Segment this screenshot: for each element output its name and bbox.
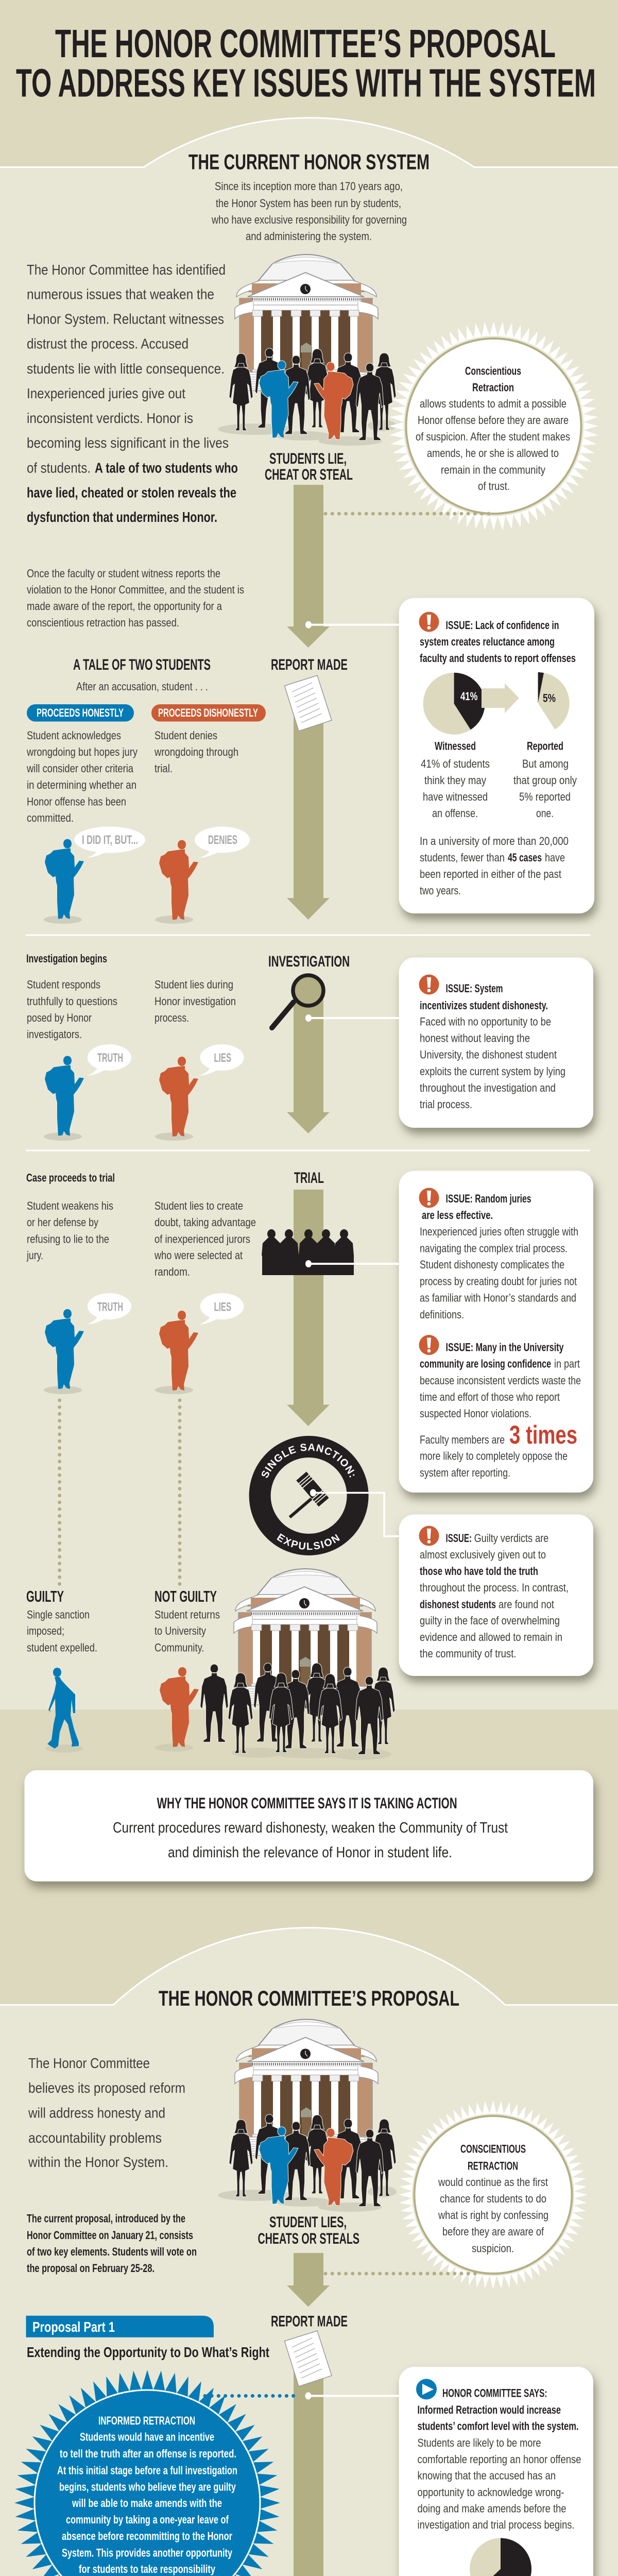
panel: why the committee says it is taking action: WHY THE HONOR COMMITTEE SAYS IT IS TAKING ACTION — [157, 1795, 457, 1812]
text: reported: that group only — [513, 774, 577, 787]
heading: students lie, cheat or steal — [265, 450, 353, 483]
panel: issue guilty verdicts — [399, 1515, 593, 1676]
pill: proceeds honestly — [27, 704, 134, 721]
text: honest investigation: Student responds — [27, 978, 100, 991]
illustration: student crowd 1 — [218, 348, 397, 446]
text: honest investigation: truthfully to questions — [27, 995, 117, 1008]
heading: report made: REPORT MADE — [271, 656, 348, 673]
text: random juries: navigating the complex trial process. — [420, 1242, 568, 1255]
callout: conscientious retraction, proposal: would continue as the first — [438, 2176, 548, 2189]
text: reported: Reported — [527, 740, 563, 753]
text: reported: But among — [522, 757, 569, 770]
text: committee belief: accountability problems — [28, 2130, 162, 2146]
text: report note — [27, 567, 244, 629]
icon: magnifier — [272, 975, 323, 1028]
text: honest student report: Student acknowledges — [27, 729, 121, 742]
heading: investigation: INVESTIGATION — [268, 953, 350, 970]
callout: informed retraction: for students to take responsibility — [79, 2563, 216, 2575]
figure: blue student truth: TRUTH — [97, 1051, 123, 1065]
panel: why the committee says it is taking action: Current procedures reward dishonesty, weaken the Community of Trust — [113, 1820, 508, 1836]
callout: conscientious retraction: of suspicion. After the student makes — [416, 430, 570, 443]
text: guilty verdicts: those who have told the truth — [420, 1565, 538, 1578]
panel: committee says informed retraction — [305, 2367, 593, 2576]
panel: issue lack of confidence — [305, 598, 594, 913]
path: dishonest verdict dots — [178, 1400, 181, 1584]
connector — [305, 1014, 399, 1022]
heading: the honor committee's proposal: THE HONOR COMMITTEE’S PROPOSAL — [159, 1986, 459, 2010]
title — [16, 22, 596, 105]
figure: blue student truth at trial — [44, 1293, 131, 1394]
text: dishonest trial — [154, 1199, 256, 1278]
text: comfort level: investigation and trial process begins. — [417, 2518, 575, 2531]
text: issue copy: throughout the investigation and — [420, 1081, 556, 1094]
icon: report paper — [284, 675, 332, 731]
callout: conscientious retraction, proposal: chance for students to do — [440, 2192, 546, 2205]
stat: 3 times: more likely to completely oppose the — [420, 1450, 568, 1463]
text: losing confidence — [420, 1341, 581, 1420]
text: witnessed — [421, 740, 490, 820]
text: losing confidence: community are losing confidence — [420, 1357, 551, 1370]
text: guilty verdicts: Guilty verdicts are — [474, 1532, 548, 1545]
text: report note: Once the faculty or student witness reports the — [27, 567, 220, 580]
text: issues overview: inconsistent verdicts. Honor is — [27, 410, 193, 426]
callout: informed retraction: will be able to make amends with the — [72, 2497, 222, 2510]
text: dishonest student report — [154, 729, 238, 775]
arrow: report to investigation — [287, 716, 330, 920]
text: dishonest trial: who were selected at — [154, 1249, 243, 1262]
text: honest trial: jury. — [26, 1249, 43, 1262]
text: issue copy: exploits the current system by lying — [420, 1065, 565, 1078]
text: guilty verdicts: are found not — [499, 1598, 554, 1611]
text: issues overview: A tale of two students who — [95, 460, 238, 476]
text: issue copy: trial process. — [420, 1098, 472, 1111]
text: issue copy: Faced with no opportunity to be — [420, 1015, 551, 1028]
text: intro: Since its inception more than 170 years ago, — [215, 180, 403, 193]
stat: 3 times — [420, 1420, 577, 1479]
text: honest student report: will consider other criteria — [26, 762, 134, 775]
text: issues overview: becoming less significant in the lives — [27, 435, 229, 451]
text: issues overview: Honor System. Reluctant witnesses — [27, 311, 224, 327]
illustration: student crowd 2 — [200, 1663, 395, 1760]
heading: student lies, cheats or steals — [258, 2214, 359, 2247]
callout: conscientious retraction — [387, 319, 600, 533]
text: guilty — [26, 1587, 97, 1654]
figure: orange student lies: LIES — [214, 1051, 231, 1065]
callout: informed retraction — [11, 2366, 284, 2576]
text: comfort level: doing and make amends before the — [417, 2502, 566, 2515]
text: guilty verdicts — [420, 1532, 569, 1660]
text: dishonest trial: Student lies to create — [154, 1199, 243, 1212]
text: honest student report: Honor offense has been — [27, 795, 126, 808]
text: current proposal: the proposal on February 25-28. — [27, 2262, 154, 2275]
text: 45 cases: have — [545, 851, 565, 864]
text: committee belief: believes its proposed reform — [28, 2080, 185, 2096]
text: dishonest trial: doubt, taking advantage — [154, 1216, 256, 1229]
text: comfort level: knowing that the accused has an — [417, 2469, 556, 2482]
callout: conscientious retraction, proposal: before they are aware of — [442, 2225, 544, 2238]
callout: conscientious retraction, proposal: suspicion. — [472, 2242, 514, 2255]
icon: issue — [419, 1335, 439, 1355]
text: reported — [513, 740, 577, 820]
arrow: witnessed to reported — [482, 683, 519, 713]
figure: blue student truth — [44, 1044, 131, 1141]
connector — [305, 1260, 399, 1267]
callout: conscientious retraction: Retraction — [472, 381, 514, 394]
text: intro: the Honor System has been run by students, — [216, 197, 401, 210]
text: witnessed: think they may — [424, 774, 486, 787]
chart: reported pie 5% — [538, 672, 570, 730]
callout: informed retraction: Students would have an incentive — [80, 2431, 214, 2444]
text: dishonest student report: wrongdoing through — [154, 745, 238, 758]
text: 45 cases: two years. — [420, 884, 461, 897]
pill: proceeds dishonestly — [151, 704, 266, 721]
connector — [305, 621, 399, 629]
illustration: rotunda 2 — [234, 1569, 377, 1705]
callout: conscientious retraction: amends, he or she is allowed to — [427, 447, 559, 460]
text: comfort level: HONOR COMMITTEE SAYS: — [442, 2387, 547, 2400]
heading: issue text — [420, 619, 576, 665]
text: current proposal: of two key elements. Students will vote on — [27, 2245, 197, 2258]
text: not guilty: NOT GUILTY — [154, 1587, 217, 1605]
callout: informed retraction: INFORMED RETRACTION — [98, 2414, 195, 2427]
text: random juries: ISSUE: Random juries — [446, 1192, 531, 1205]
callout: informed retraction: System. This provides another opportunity — [62, 2547, 233, 2560]
callout: informed retraction: community by taking a one-year leave of — [66, 2513, 229, 2526]
icon: issue — [419, 612, 439, 632]
heading: students lie, cheat or steal: STUDENTS LIE, — [269, 450, 347, 467]
text: committee belief: The Honor Committee — [28, 2055, 150, 2071]
heading: extending the opportunity: Extending the Opportunity to Do What’s Right — [27, 2344, 269, 2360]
text: not guilty: to University — [154, 1624, 206, 1637]
figure: orange student lies — [155, 1044, 244, 1141]
text: committee belief — [28, 2055, 185, 2170]
text: random juries: are less effective. — [422, 1209, 493, 1222]
text: honest investigation: investigators. — [27, 1028, 82, 1041]
text: guilty: imposed; — [27, 1624, 64, 1637]
panel: why the committee says it is taking action — [25, 1770, 593, 1882]
text: random juries: process by creating doubt for juries not — [420, 1275, 577, 1288]
text: comfort level: Students are likely to be more — [417, 2436, 541, 2449]
icon: play — [416, 2379, 437, 2399]
figure: blue student truth at trial: TRUTH — [97, 1300, 123, 1314]
background: proposal section — [0, 1928, 618, 2576]
text: honest trial — [26, 1199, 113, 1262]
text: issue copy: incentivizes student dishonesty. — [420, 999, 548, 1012]
callout: conscientious retraction, proposal — [397, 2099, 589, 2291]
icon: issue — [419, 975, 439, 994]
text: random juries: Inexperienced juries often struggle with — [420, 1225, 578, 1238]
text: guilty: student expelled. — [27, 1641, 97, 1654]
stat: 3 times: 3 times — [509, 1420, 577, 1449]
heading: trial: TRIAL — [294, 1170, 324, 1187]
text: dishonest investigation: process. — [154, 1011, 189, 1024]
text: not guilty: Community. — [154, 1641, 204, 1654]
heading: issue text: system creates reluctance among — [420, 635, 555, 648]
tab: proposal part 1 — [26, 2316, 214, 2337]
text: report note: made aware of the report, the opportunity for a — [27, 600, 222, 613]
text: not guilty: Student returns — [154, 1608, 220, 1621]
text: 45 cases: 45 cases — [508, 851, 542, 864]
callout: conscientious retraction: Honor offense before they are aware — [418, 414, 569, 427]
figure: orange student with speech bubble — [155, 826, 250, 924]
path: honest verdict dots — [58, 1400, 61, 1584]
text: committee belief: within the Honor System. — [28, 2154, 168, 2170]
text: issues overview: Inexperienced juries give out — [27, 385, 185, 401]
figure: blue student expelled — [45, 1668, 83, 1753]
text: issues overview: have lied, cheated or stolen reveals the — [27, 484, 236, 501]
text: 45 cases — [420, 835, 569, 897]
text: losing confidence: because inconsistent verdicts waste the — [420, 1374, 581, 1387]
text: guilty verdicts: guilty in the face of overwhelming — [420, 1614, 560, 1627]
figure: orange student with speech bubble: DENIES — [208, 833, 237, 847]
text: 45 cases: been reported in either of the past — [420, 868, 561, 880]
arrow: flow to report, proposal — [287, 2253, 330, 2307]
text: current proposal: The current proposal, introduced by the — [27, 2212, 185, 2225]
illustration: rotunda 1 — [235, 255, 378, 391]
text: not guilty — [154, 1587, 220, 1654]
arrow: trial to verdict — [287, 1190, 330, 1426]
heading: a tale of two students: A TALE OF TWO STUDENTS — [73, 656, 211, 673]
text: after an accusation: After an accusation, student . . . — [76, 680, 208, 693]
icon: jury — [262, 1229, 354, 1275]
seal: single sanction expulsion: EXPULSION — [277, 1533, 340, 1550]
text: random juries — [420, 1192, 578, 1321]
callout: informed retraction: absence before recommitting to the Honor — [62, 2530, 232, 2543]
text: losing confidence: ISSUE: Many in the University — [446, 1341, 564, 1354]
callout: conscientious retraction, proposal: CONSCIENTIOUS — [460, 2143, 526, 2156]
text: guilty verdicts: dishonest students — [420, 1598, 496, 1611]
heading: issue text: ISSUE: Lack of confidence in — [446, 619, 559, 632]
chart: reported pie 5%: 5% — [543, 692, 556, 705]
text: witnessed: Witnessed — [435, 740, 476, 753]
text: guilty verdicts: evidence and allowed to remain in — [420, 1631, 562, 1643]
text: intro: who have exclusive responsibility for governing — [211, 213, 407, 226]
text: losing confidence: suspected Honor violations. — [420, 1407, 531, 1420]
text: honest student report: wrongdoing but hopes jury — [26, 745, 138, 758]
text: honest trial: Student weakens his — [27, 1199, 113, 1212]
text: dishonest student report: Student denies — [154, 729, 217, 742]
text: guilty verdicts: almost exclusively given out to — [420, 1548, 546, 1561]
text: comfort level: comfortable reporting an honor offense — [417, 2453, 581, 2466]
callout: conscientious retraction: Conscientious — [465, 365, 521, 377]
text: witnessed: 41% of students — [421, 757, 490, 770]
text: report note: conscientious retraction has passed. — [27, 616, 179, 629]
text: honest student report: in determining whether an — [27, 778, 136, 791]
text: random juries: definitions. — [420, 1308, 464, 1321]
callout: conscientious retraction, proposal: RETRACTION — [468, 2160, 518, 2172]
heading: student lies, cheats or steals: CHEATS OR STEALS — [258, 2230, 359, 2247]
seal: single sanction expulsion: SINGLE SANCTION: — [262, 1444, 354, 1478]
text: comfort level — [417, 2387, 581, 2531]
callout: conscientious retraction: allows students to admit a possible — [420, 397, 566, 410]
icon: report paper, proposal — [284, 2331, 332, 2386]
panel: why the committee says it is taking action: and diminish the relevance of Honor in student life. — [168, 1844, 452, 1861]
text: issue copy — [420, 982, 565, 1111]
callout: informed retraction: begins, students who believe they are guilty — [59, 2480, 236, 2493]
text: reported: one. — [536, 807, 554, 820]
heading: students lie, cheat or steal: CHEAT OR STEAL — [265, 466, 353, 483]
text: witnessed: an offense. — [432, 807, 478, 820]
text: honest trial: refusing to lie to the — [27, 1233, 109, 1246]
text: issues overview: dysfunction that undermines Honor. — [27, 509, 217, 525]
text: intro — [211, 180, 407, 243]
text: random juries: Student dishonesty complicates the — [420, 1258, 564, 1271]
figure: orange student lies at trial: LIES — [214, 1300, 231, 1314]
text: current proposal: Honor Committee on January 21, consists — [27, 2229, 193, 2242]
heading: case proceeds to trial: Case proceeds to trial — [26, 1172, 115, 1184]
stat: 3 times: system after reporting. — [420, 1466, 510, 1479]
heading: the current honor system: THE CURRENT HONOR SYSTEM — [188, 149, 430, 174]
text: guilty verdicts: throughout the process. In contrast, — [420, 1581, 569, 1594]
text: issues overview: of students. — [27, 460, 91, 476]
text: dishonest investigation: Honor investigation — [154, 995, 236, 1008]
seal: single sanction expulsion — [249, 1436, 369, 1555]
text: issues overview — [27, 262, 238, 525]
background: current system section — [0, 118, 618, 1709]
text: reported: 5% reported — [519, 790, 571, 803]
figure: blue student with speech bubble — [44, 826, 145, 924]
text: issues overview: distrust the process. Accused — [27, 336, 188, 351]
panel: issue system incentivizes dishonesty — [305, 957, 593, 1128]
text: dishonest investigation — [154, 978, 236, 1024]
icon: issue — [419, 1526, 439, 1546]
panel: issue random juries and confidence — [305, 1171, 593, 1493]
text: dishonest investigation: Student lies during — [154, 978, 233, 991]
tab: proposal part 1: Proposal Part 1 — [32, 2319, 115, 2335]
text: comfort level: opportunity to acknowledge wrong- — [417, 2486, 564, 2499]
pill: proceeds dishonestly: PROCEEDS DISHONESTLY — [158, 706, 258, 719]
text: guilty verdicts: ISSUE: — [446, 1532, 472, 1545]
callout: conscientious retraction: remain in the community — [441, 464, 545, 476]
text: honest investigation — [27, 978, 117, 1041]
connector — [305, 2392, 399, 2399]
text: guilty: GUILTY — [26, 1587, 64, 1605]
text: guilty verdicts: the community of trust. — [420, 1647, 516, 1660]
text: dishonest student report: trial. — [154, 762, 173, 775]
text: honest trial: or her defense by — [27, 1216, 98, 1229]
pill: proceeds honestly: PROCEEDS HONESTLY — [37, 706, 124, 719]
heading: investigation begins: Investigation begins — [26, 952, 107, 965]
text: random juries: as familiar with Honor’s standards and — [420, 1292, 576, 1304]
text: dishonest trial: random. — [154, 1265, 190, 1278]
text: witnessed: have witnessed — [423, 790, 488, 803]
callout: informed retraction: to tell the truth after an offense is reported. — [60, 2447, 236, 2460]
text: losing confidence: in part — [554, 1357, 580, 1370]
callout: conscientious retraction: of trust. — [478, 480, 510, 493]
figure: blue student with speech bubble: I DID IT, BUT... — [82, 833, 138, 847]
connector: seal to guilty verdict issue — [310, 1489, 399, 1536]
text: honest student report: committed. — [27, 811, 74, 824]
text: losing confidence: time and effort of those who report — [420, 1391, 560, 1403]
text: 45 cases: students, fewer than — [420, 851, 505, 864]
text: honest investigation: posed by Honor — [27, 1011, 92, 1024]
text: issue copy: University, the dishonest student — [420, 1048, 557, 1061]
text: guilty: Single sanction — [27, 1608, 90, 1621]
arrow: investigation to trial — [287, 994, 330, 1133]
text: intro: and administering the system. — [246, 230, 372, 243]
text: committee belief: will address honesty and — [28, 2105, 165, 2121]
text: honest student report — [26, 729, 138, 824]
callout: conscientious retraction, proposal: what is right by confessing — [438, 2209, 548, 2222]
text: issues overview: numerous issues that weaken the — [27, 286, 214, 302]
heading: report made, proposal: REPORT MADE — [271, 2313, 348, 2330]
text: issues overview: students lie with little consequence. — [27, 361, 225, 377]
figure: orange student lies at trial — [155, 1293, 244, 1394]
chart: witnessed pie 41% — [423, 673, 485, 735]
icon: issue — [419, 1188, 439, 1208]
text: comfort level: Informed Retraction would increase — [417, 2403, 561, 2416]
text: current proposal — [27, 2212, 197, 2275]
text: dishonest trial: of inexperienced jurors — [154, 1233, 250, 1246]
illustration: student crowd 3 — [218, 2114, 397, 2212]
chart: witnessed pie 41%: 41% — [460, 690, 478, 703]
figure: orange student returns — [155, 1667, 199, 1752]
arrow: report to investigation, proposal — [287, 2370, 330, 2576]
illustration: rotunda 3 — [235, 2020, 378, 2156]
text: issue copy: honest without leaving the — [420, 1032, 530, 1045]
callout: informed retraction: At this initial stage before a full investigation — [57, 2464, 237, 2477]
text: 45 cases: In a university of more than 20,000 — [420, 835, 569, 848]
text: issue copy: ISSUE: System — [446, 982, 503, 995]
text: issues overview: The Honor Committee has identified — [27, 262, 226, 278]
text: report note: violation to the Honor Committee, and the student is — [27, 583, 244, 596]
heading: student lies, cheats or steals: STUDENT LIES, — [269, 2214, 347, 2231]
stat: 3 times: Faculty members are — [420, 1433, 505, 1446]
chart: 63% pie — [470, 2538, 531, 2576]
arrow: flow to report — [287, 485, 330, 648]
